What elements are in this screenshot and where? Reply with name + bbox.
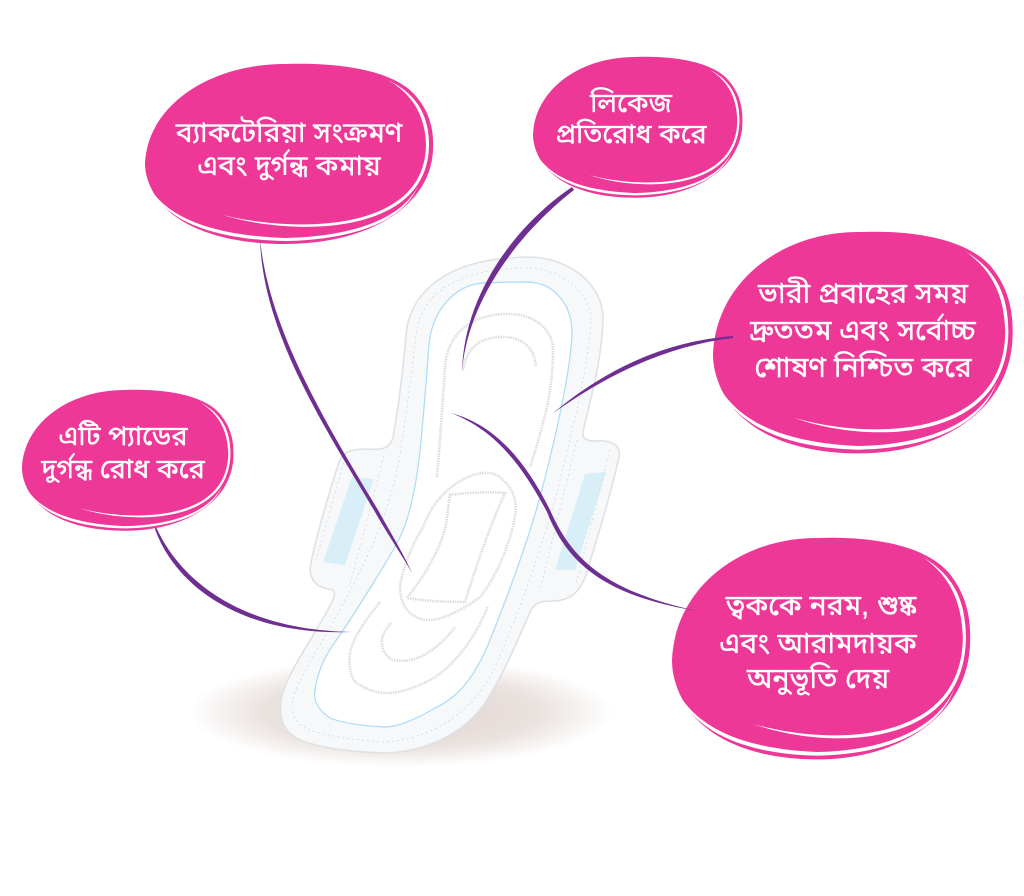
callout: heavy flow: দ্রুততম এবং সর্বোচ্চ	[749, 313, 976, 347]
lower outer channel	[349, 602, 488, 693]
callout text: এটি প্যাডের	[59, 420, 188, 451]
arrow line: bacteria callout to pad	[260, 238, 412, 573]
bubble shape	[713, 232, 1013, 453]
callout text: ভারী প্রবাহের সময়	[757, 277, 969, 310]
upper channel	[437, 314, 553, 477]
callout: odour	[22, 390, 233, 531]
bubble shape	[22, 390, 233, 531]
lower inner channel	[382, 623, 455, 661]
arrow line: leakage callout to pad	[462, 187, 574, 372]
callout: skin comfort: এবং আরামদায়ক	[719, 628, 918, 660]
illustration: sanitary pad	[281, 257, 619, 753]
callout: skin comfort	[672, 538, 970, 759]
upper inner channel	[463, 337, 536, 370]
arrow line: skin comfort callout to pad	[451, 413, 697, 611]
callout text: ত্বককে নরম, শুষ্ক	[725, 590, 917, 622]
pad border stitching	[292, 268, 591, 742]
callout: leakage: প্রতিরোধ করে	[555, 118, 707, 149]
bubble shape	[533, 57, 742, 198]
wing patch left	[323, 477, 374, 565]
callout: odour: দুর্গন্ধ রোধ করে	[40, 452, 205, 484]
callout: heavy flow: শোষণ নিশ্চিত করে	[754, 351, 973, 384]
arrow line: odour callout to pad	[155, 527, 352, 632]
callout text: ব্যাকটেরিয়া সংক্রমণ	[175, 116, 403, 148]
bubble shape	[145, 64, 433, 244]
callout: heavy flow	[713, 232, 1013, 453]
callout: bacteria	[145, 64, 433, 244]
arrow line: heavy flow callout to pad	[552, 336, 733, 414]
wing patch right	[555, 472, 606, 570]
callout: skin comfort: অনুভূতি দেয়	[746, 662, 890, 696]
wing stitching right	[540, 440, 610, 590]
pad outer shape	[281, 257, 619, 753]
callout: bacteria: এবং দুর্গন্ধ কমায়	[197, 148, 381, 181]
callout text: লিকেজ	[589, 87, 673, 118]
callout: leakage	[533, 57, 742, 198]
shadow under pad	[189, 657, 613, 767]
bubble shape	[672, 538, 970, 759]
central quadrilateral channel	[407, 492, 505, 602]
wing stitching left	[316, 456, 384, 585]
pad absorbent core	[315, 282, 572, 727]
central oval channel	[400, 473, 516, 620]
